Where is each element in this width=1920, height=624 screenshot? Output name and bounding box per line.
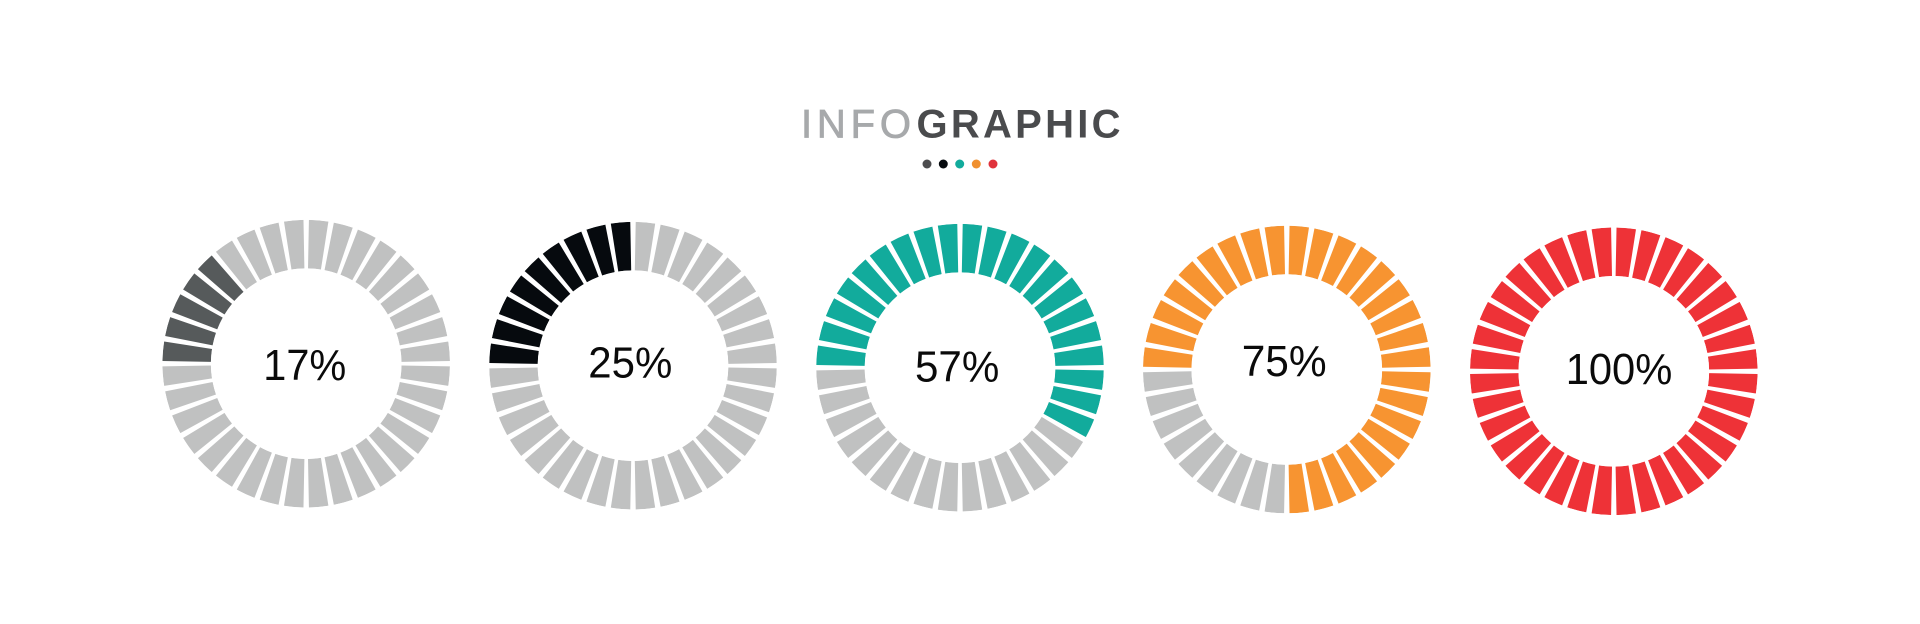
title xyxy=(801,103,1120,147)
donut chart: 57% xyxy=(840,248,1080,487)
label: 57%: 57% xyxy=(915,343,999,392)
donut chart: 100% xyxy=(1494,252,1733,491)
title: GRAPHIC xyxy=(916,103,1120,147)
donut chart: 25% xyxy=(513,246,753,485)
label: 17%: 17% xyxy=(263,341,346,390)
label: 25%: 25% xyxy=(588,339,672,388)
decorative colour dots under title xyxy=(922,160,998,168)
donut chart: 17% xyxy=(187,244,426,483)
label: 100%: 100% xyxy=(1566,345,1672,394)
donut chart: 75% xyxy=(1167,250,1406,489)
label: 75%: 75% xyxy=(1242,337,1327,386)
title: INFO xyxy=(801,103,911,147)
